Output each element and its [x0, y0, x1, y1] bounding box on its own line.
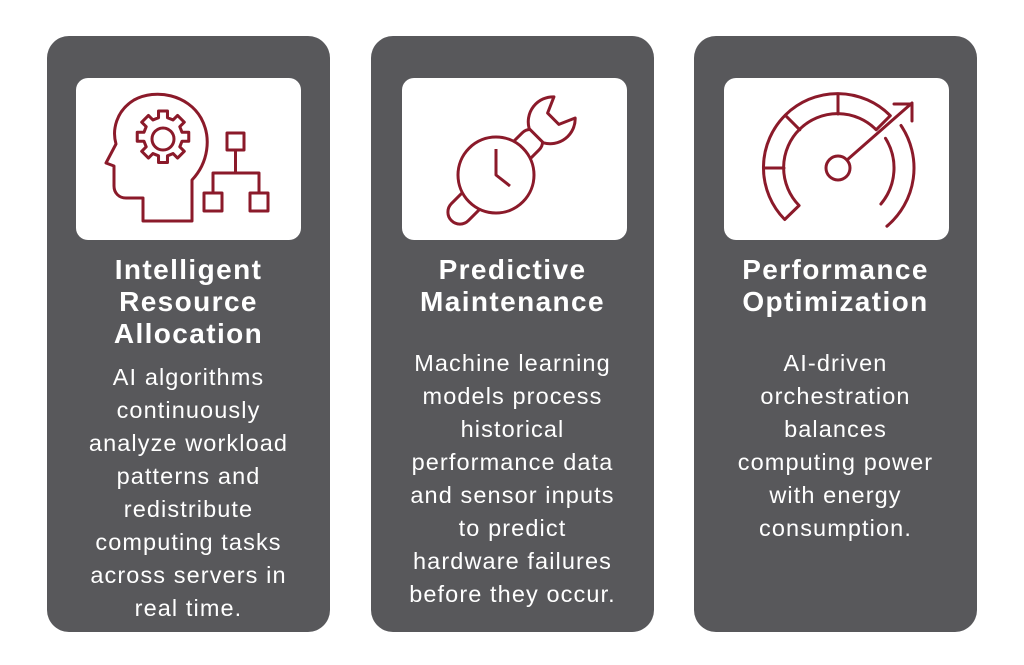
text block: with energy: [769, 482, 902, 508]
text block: [89, 364, 288, 621]
text block: and sensor inputs: [410, 482, 615, 508]
text block: models process: [423, 383, 602, 409]
text block: analyze workload: [89, 430, 288, 456]
text block: Machine learning: [414, 350, 611, 376]
title: Maintenance: [420, 286, 605, 317]
text block: redistribute: [124, 496, 253, 522]
text block: balances: [784, 416, 887, 442]
title: [114, 254, 263, 349]
text block: AI-driven: [784, 350, 887, 376]
icon: speedometer with arrow: [724, 78, 949, 240]
text block: hardware failures: [413, 548, 612, 574]
text block: historical: [461, 416, 564, 442]
text block: performance data: [412, 449, 613, 475]
text block: to predict: [459, 515, 566, 541]
text block: computing power: [738, 449, 933, 475]
text block: real time.: [135, 595, 242, 621]
text block: orchestration: [760, 383, 911, 409]
title: [420, 254, 605, 317]
panel: intelligent resource allocation: [47, 36, 330, 632]
text block: across servers in: [90, 562, 287, 588]
panel: predictive maintenance: [371, 36, 654, 632]
title: Allocation: [114, 318, 263, 349]
icon: clock with wrench: [402, 78, 627, 240]
text block: [738, 350, 933, 541]
text block: computing tasks: [95, 529, 282, 555]
title: [742, 254, 929, 317]
icon: head with gear and network: [76, 78, 301, 240]
title: Performance: [742, 254, 929, 285]
text block: consumption.: [759, 515, 912, 541]
text block: [409, 350, 616, 607]
title: Intelligent: [115, 254, 262, 285]
title: Resource: [119, 286, 258, 317]
title: Optimization: [742, 286, 929, 317]
text block: patterns and: [117, 463, 260, 489]
text block: AI algorithms: [113, 364, 264, 390]
panel: performance optimization: [694, 36, 977, 632]
title: Predictive: [439, 254, 586, 285]
text block: continuously: [117, 397, 260, 423]
text block: before they occur.: [409, 581, 616, 607]
